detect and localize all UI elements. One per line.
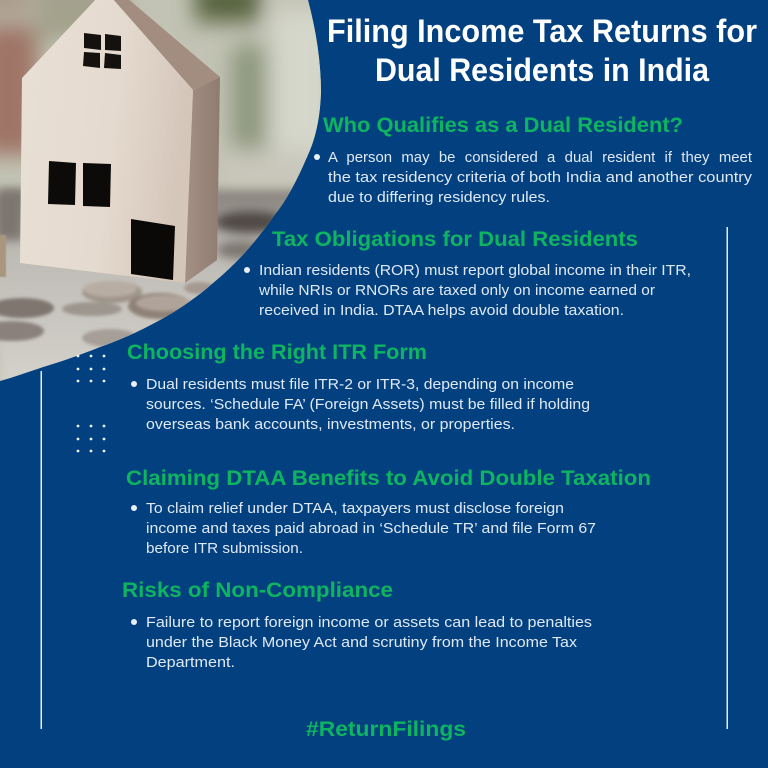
heading: tax obligations: Tax Obligations for Dual Residents xyxy=(272,228,638,251)
heading: risks: Risks of Non-Compliance xyxy=(122,579,393,602)
bullet text: risks xyxy=(131,615,592,671)
icon: attic window xyxy=(83,33,121,69)
right vertical line xyxy=(726,227,728,729)
photo: wooden house on coins xyxy=(0,0,332,390)
icon: lower windows xyxy=(48,161,111,207)
section: claiming dtaa xyxy=(126,467,651,557)
bullet text: claiming dtaa: income and taxes paid abroad in ‘Schedule TR’ and file Form 67 xyxy=(146,521,596,537)
section: who qualifies xyxy=(314,114,753,206)
bullet text: tax obligations: received in India. DTAA helps avoid double taxation. xyxy=(259,303,624,319)
bullet text: choosing form xyxy=(131,377,590,433)
bullet text: risks: Failure to report foreign income or assets can lead to penalties xyxy=(146,615,592,631)
bullet text: tax obligations: Indian residents (ROR) must report global income in their ITR, xyxy=(259,263,691,279)
bullet text: choosing form: sources. ‘Schedule FA’ (Foreign Assets) must be filled if holding xyxy=(146,397,590,413)
bullet text: tax obligations xyxy=(244,263,691,319)
section: tax obligations xyxy=(244,228,691,319)
left vertical line xyxy=(40,371,42,729)
hashtag: #ReturnFilings xyxy=(306,718,466,741)
bullet text: choosing form: overseas bank accounts, investments, or properties. xyxy=(146,417,515,433)
title: Filing Income Tax Returns for xyxy=(327,13,757,49)
section: risks xyxy=(122,579,592,671)
heading: choosing form: Choosing the Right ITR Form xyxy=(127,341,427,364)
heading: claiming dtaa: Claiming DTAA Benefits to Avoid Double Taxation xyxy=(126,467,651,490)
house side wall xyxy=(185,77,220,283)
dots pattern upper xyxy=(77,355,105,382)
title xyxy=(327,13,757,88)
bullet text: who qualifies: A person may be considered a dual resident if they meet xyxy=(328,150,752,166)
bullet text: choosing form: Dual residents must file ITR-2 or ITR-3, depending on income xyxy=(146,377,574,393)
icon: door xyxy=(131,219,175,280)
bullet text: who qualifies: due to differing residency rules. xyxy=(328,190,550,206)
house front wall xyxy=(20,0,193,283)
section: choosing form xyxy=(127,341,590,433)
bullet text: risks: Department. xyxy=(146,655,235,671)
bullet text: who qualifies: the tax residency criteria of both India and another country xyxy=(328,170,753,186)
title: Dual Residents in India xyxy=(375,52,709,88)
bullet text: claiming dtaa: before ITR submission. xyxy=(146,541,303,557)
dots pattern lower xyxy=(77,425,105,452)
bullet text: claiming dtaa xyxy=(131,501,596,557)
heading: who qualifies: Who Qualifies as a Dual Resident? xyxy=(323,114,683,137)
icon: coins on table xyxy=(0,281,216,347)
icon: coin stack at left edge xyxy=(0,235,6,277)
bullet text: claiming dtaa: To claim relief under DTAA, taxpayers must disclose foreign xyxy=(146,501,564,517)
bullet text: tax obligations: while NRIs or RNORs are taxed only on income earned or xyxy=(258,283,655,299)
bullet text: who qualifies xyxy=(314,150,753,206)
bullet text: risks: under the Black Money Act and scrutiny from the Income Tax xyxy=(146,635,578,651)
